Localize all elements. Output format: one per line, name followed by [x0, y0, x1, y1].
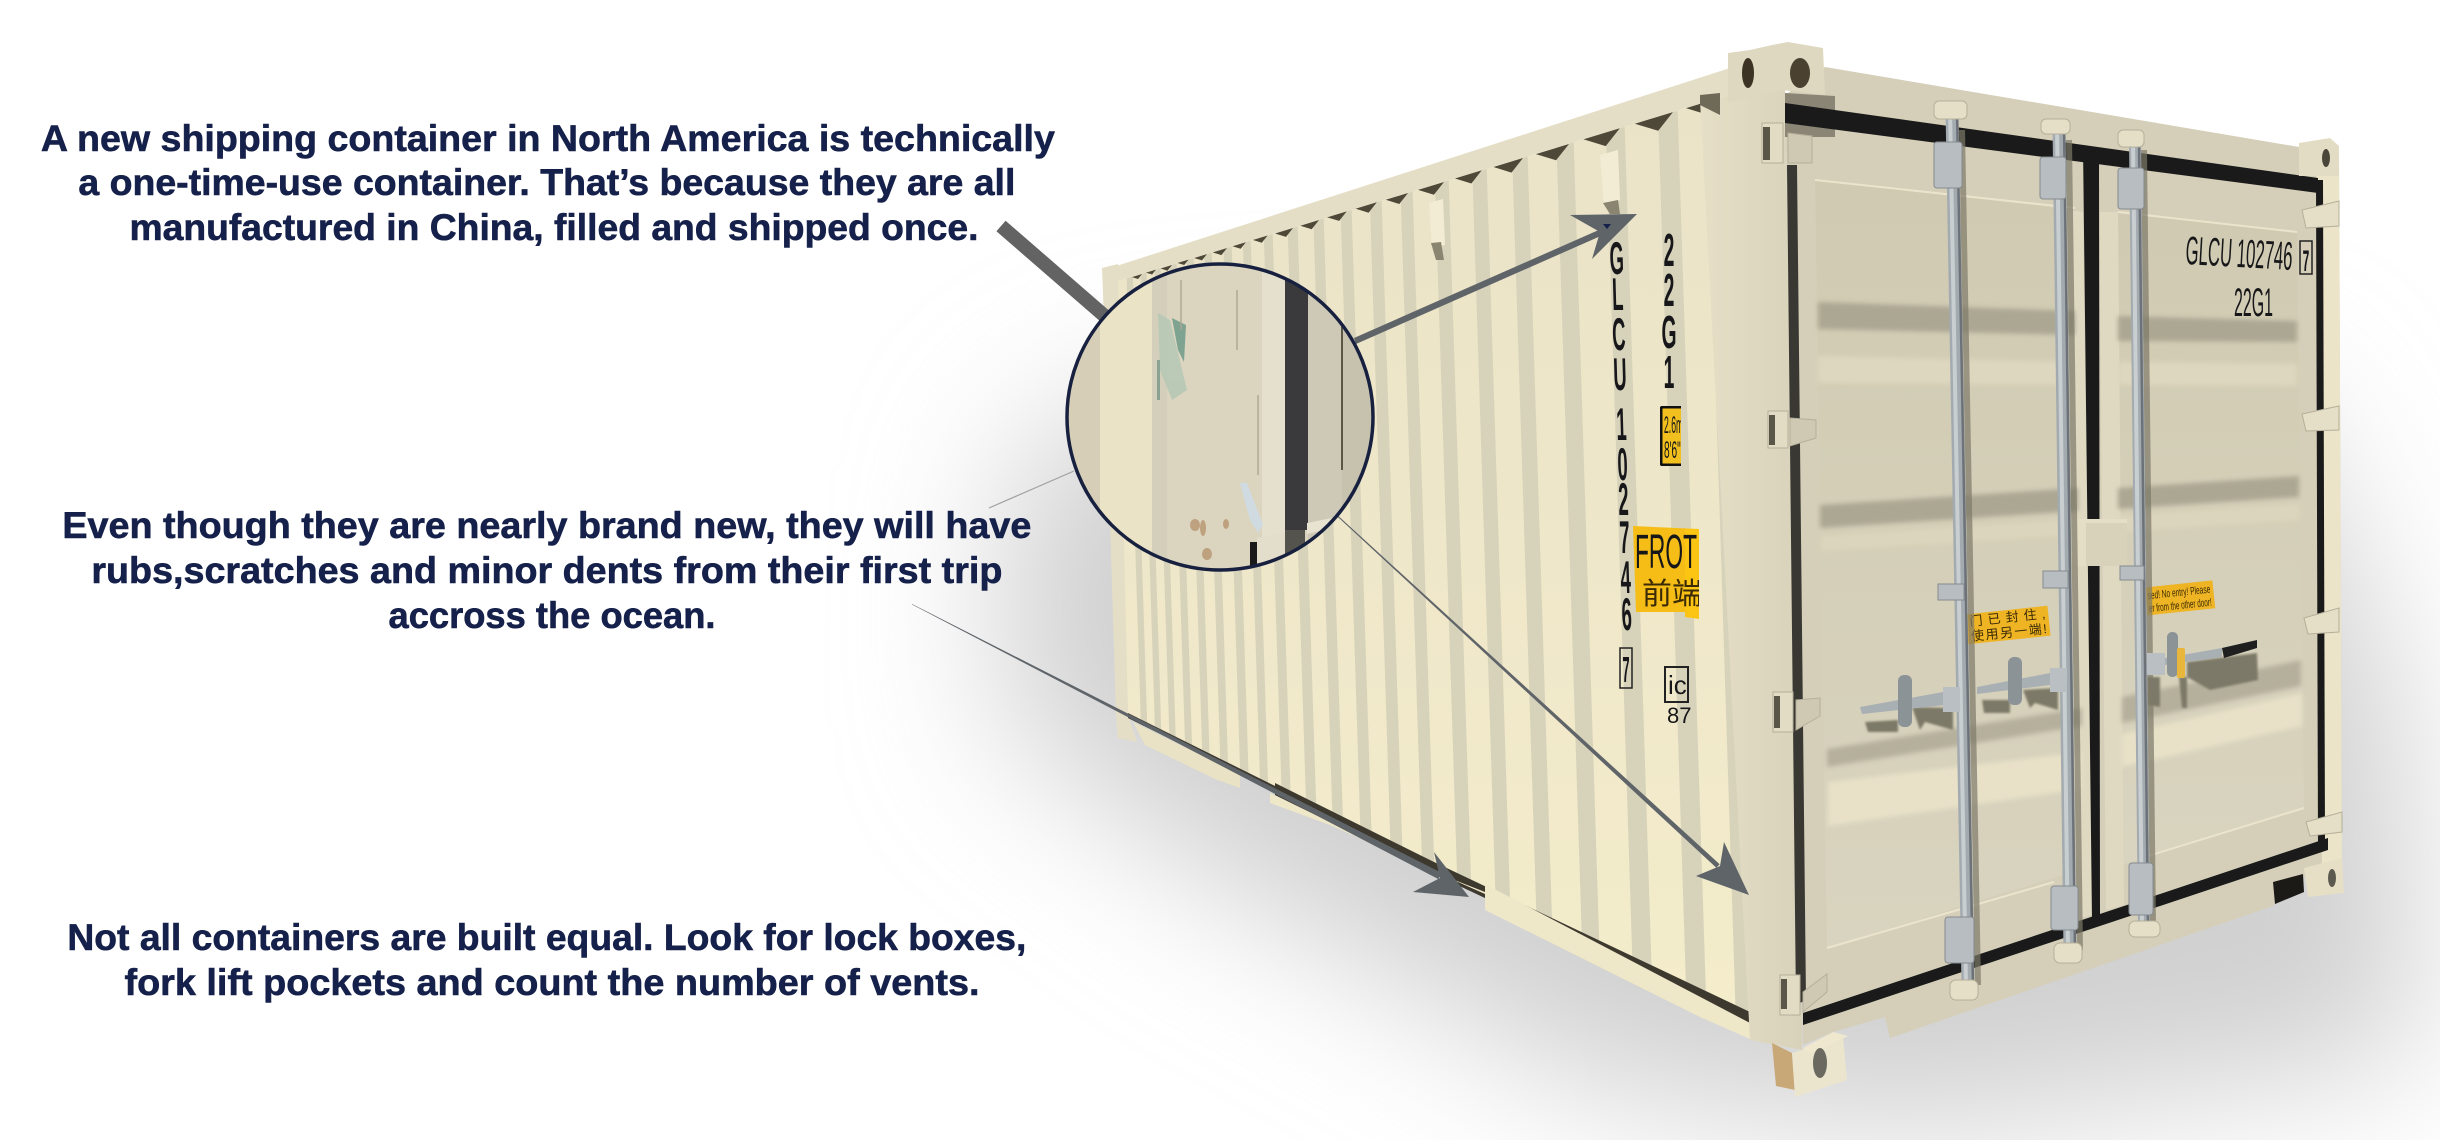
warning sticker right door: sed! No entry! Please: [2147, 584, 2211, 602]
corrugations: [1126, 110, 1748, 1012]
rod end caps: [1934, 101, 2160, 1000]
green scratch: [1157, 313, 1187, 400]
ground shadow: [1000, 360, 2420, 1130]
container number vertical: U: [1613, 349, 1627, 401]
container number vertical: 2: [1618, 474, 1629, 526]
arrow: lens to lower corner damage: [1311, 491, 1749, 895]
door markings: 22G1: [2234, 281, 2273, 325]
side latch brackets: [1429, 150, 1620, 260]
warning sticker right door: er from the other door!: [2148, 597, 2212, 615]
shipping container photo: [1102, 0, 2344, 1140]
handle 2: [1977, 657, 2067, 705]
rod 3: [2133, 140, 2148, 925]
thin line from second note to zoom lens: [989, 471, 1074, 508]
arrow: second note to bottom rail: [912, 604, 1469, 897]
container number vertical: 0: [1617, 439, 1628, 491]
iic mark: [1665, 667, 1691, 728]
right door panel: [2118, 212, 2304, 864]
container number vertical: 7: [1619, 512, 1630, 564]
note 2 text: rubs,scratches and minor dents from their first trip: [91, 550, 1002, 591]
rod brackets: [1934, 142, 2153, 963]
door markings: [2184, 229, 2312, 325]
bottom dark strip: [1275, 783, 1750, 1023]
brown flecks: [1190, 519, 1229, 560]
container side wall: [1102, 68, 1750, 1039]
height warning label: 2.6m: [1664, 412, 1683, 438]
left door panel: [1815, 180, 2088, 948]
handle 1: [1860, 675, 1960, 727]
blue-white scratch: [1240, 483, 1263, 533]
container number vertical: G: [1609, 233, 1625, 285]
note 1 text: a one-time-use container. That’s because they are all: [78, 162, 1015, 203]
FRONT sticker: FROT: [1635, 526, 1697, 579]
left post hinges: [1762, 123, 1827, 1015]
zoom lens: close-up of scratches: [1060, 260, 1380, 580]
check digit box: [1620, 648, 1632, 690]
FRONT sticker: 前端: [1642, 578, 1702, 611]
container door end: [1700, 42, 2344, 1097]
handle shadows: [1865, 653, 2258, 732]
type code vertical: G: [1661, 308, 1677, 358]
top rail: [1104, 68, 1730, 282]
note 1 text: A new shipping container in North America is technically: [41, 118, 1055, 159]
bottom corner casting: [1772, 1032, 1848, 1097]
iic mark: ic: [1668, 670, 1687, 700]
door panel shading bands: [1818, 302, 2302, 826]
door gasket shadow: [1785, 93, 1835, 137]
type code vertical: 2: [1664, 266, 1674, 316]
door handles: [1860, 632, 2257, 727]
grey streaks: [1180, 280, 1259, 475]
fork notch: [2273, 874, 2304, 904]
black door gaskets: [1785, 103, 2328, 1025]
note 2 text: Even though they are nearly brand new, they will have: [62, 505, 1031, 546]
container number vertical: L: [1611, 269, 1624, 321]
rod 1: [1950, 110, 1973, 985]
type code vertical: 2: [1664, 226, 1674, 276]
locking rods: [1950, 110, 2148, 985]
left corner post: [1102, 264, 1137, 742]
panel edge lines: [1815, 180, 2304, 948]
note 3 text: Not all containers are built equal. Look for lock boxes,: [67, 917, 1026, 958]
scuff marks near corner: [1745, 880, 1780, 1003]
callout connector: first note to zoom lens: [1001, 226, 1107, 318]
height warning label: [1661, 407, 1685, 465]
FRONT sticker: [1633, 526, 1702, 621]
bottom rail sections: [1133, 722, 1240, 788]
container door end: GLCU 102746: [2184, 229, 2294, 279]
door check digit: 7: [2303, 243, 2309, 278]
side wall markings: [1609, 226, 1702, 728]
lower dark gap: [1250, 542, 1257, 566]
warning sticker left door: 门已封住,: [1969, 606, 2046, 629]
warning sticker right door: [2145, 580, 2215, 615]
warning sticker left door: 使用另一端!: [1970, 621, 2048, 644]
corner post: [1700, 88, 1802, 1050]
post top shadow: [1700, 93, 1720, 115]
container number vertical: C: [1612, 309, 1626, 361]
lock box: [2070, 519, 2127, 566]
top corner casting: [1728, 42, 1825, 103]
container number vertical: 1: [1616, 399, 1627, 451]
top right corner casting: [2299, 138, 2339, 176]
container number vertical: 6: [1621, 589, 1633, 641]
arrow: lens to upper container: [1354, 214, 1637, 344]
right post: [2316, 150, 2342, 870]
iic mark: 87: [1667, 703, 1691, 728]
note 2 text: accross the ocean.: [388, 595, 716, 636]
door face: [1785, 67, 2342, 1045]
warning sticker left door: [1964, 606, 2051, 644]
rod 2: [2057, 125, 2075, 950]
right post hinges: [2302, 201, 2342, 836]
bottom right casting: [2304, 858, 2344, 897]
height warning label: 8'6": [1664, 436, 1681, 463]
container number vertical: 4: [1620, 552, 1632, 604]
check digit box: 7: [1622, 650, 1630, 690]
type code vertical: 1: [1664, 348, 1674, 398]
corrugation shadows under top rail: [1132, 98, 1719, 279]
note 3 text: fork lift pockets and count the number of vents.: [124, 962, 980, 1003]
handle 3: [2147, 632, 2257, 678]
centre door stiles: [2068, 210, 2124, 920]
rod shadows: [1962, 130, 2153, 985]
note 1 text: manufactured in China, filled and shipped once.: [130, 207, 978, 248]
